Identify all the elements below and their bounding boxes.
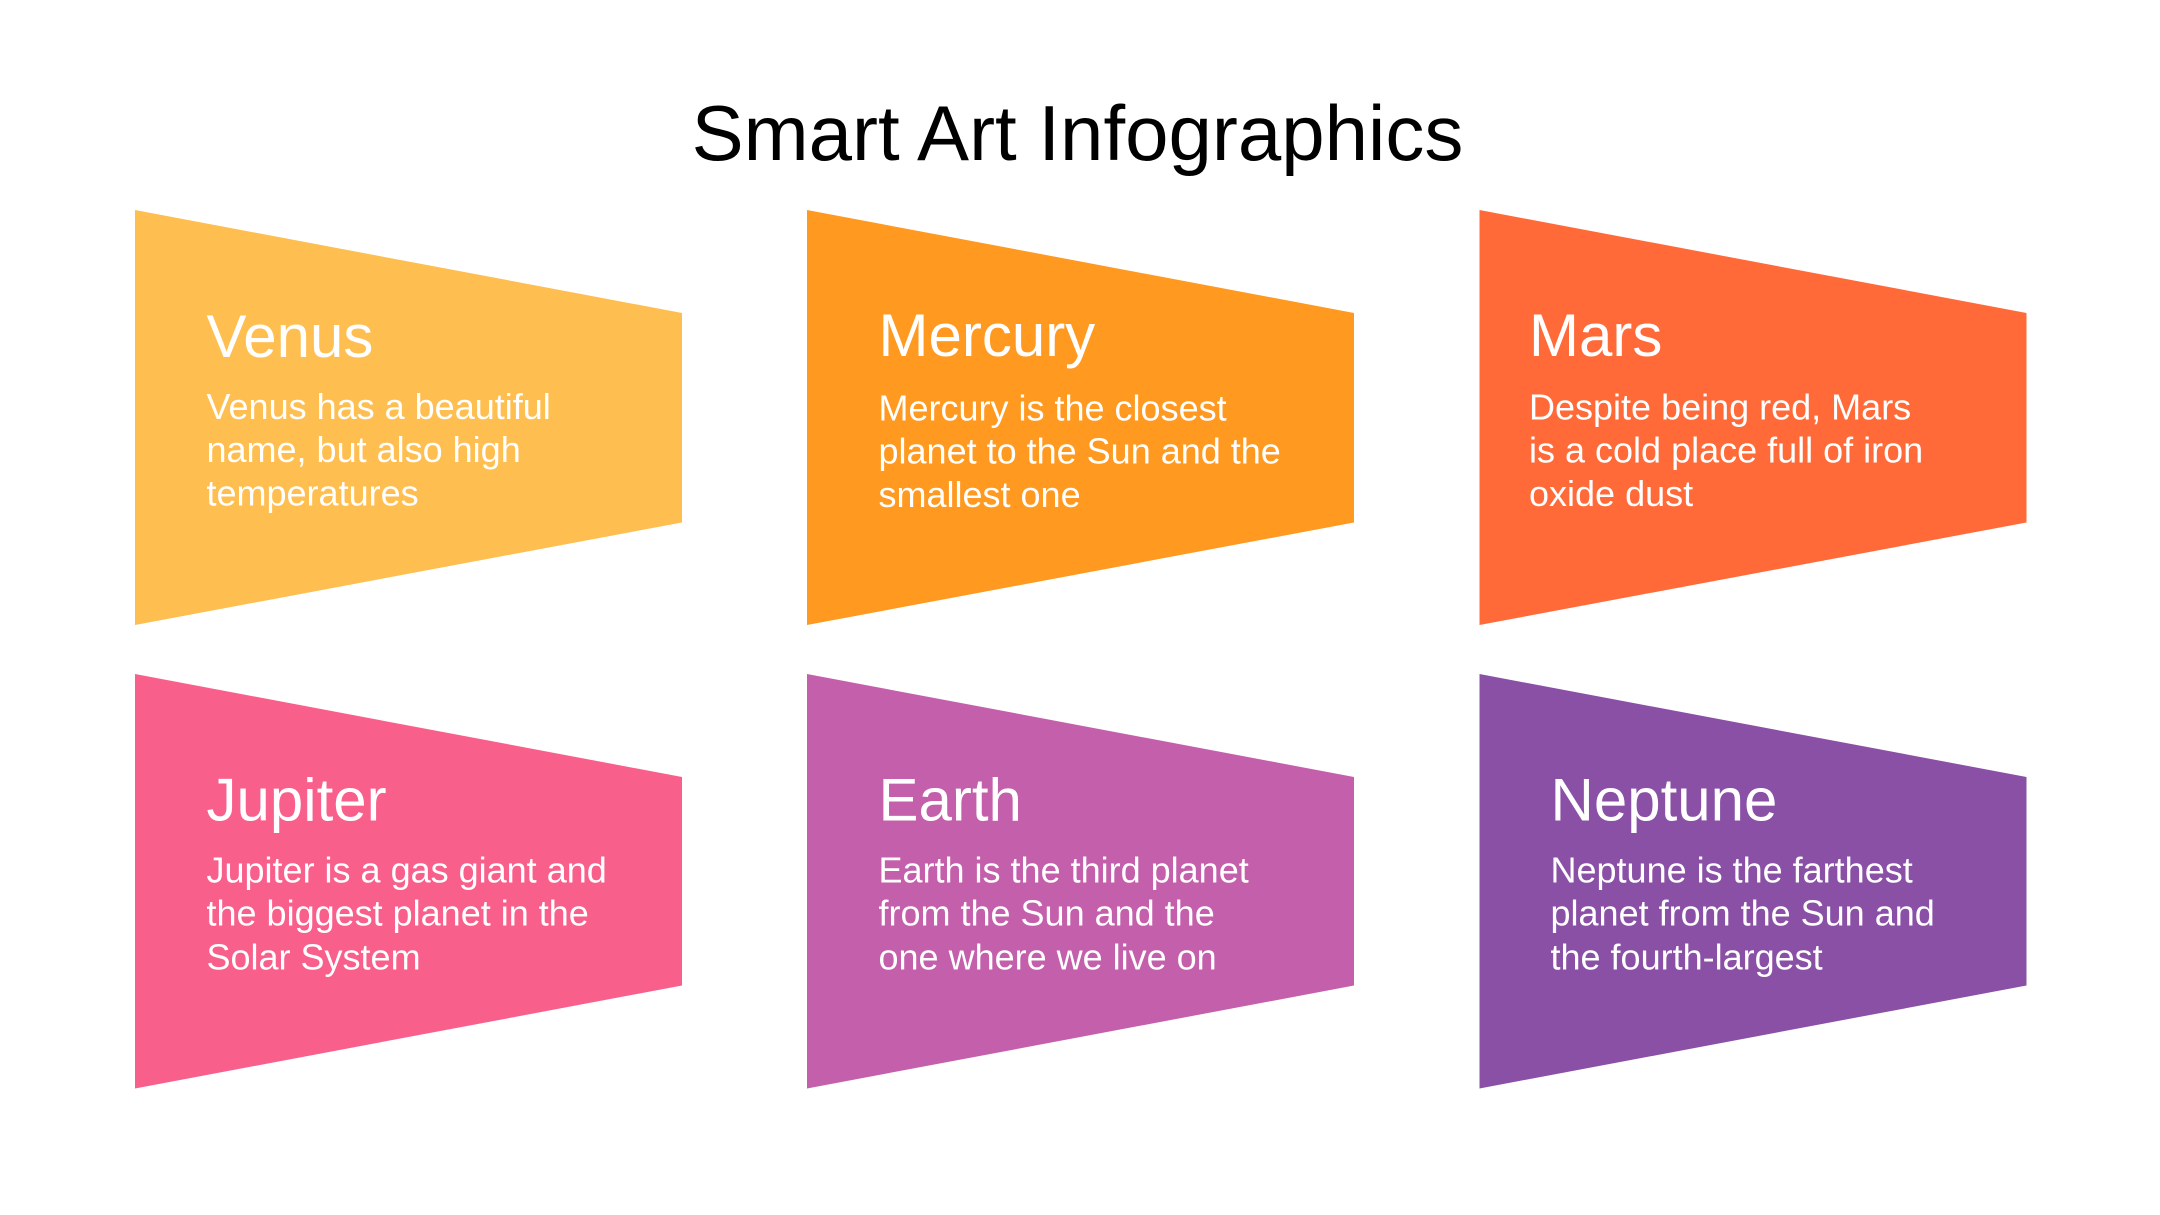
panel: Jupiter: Jupiter <box>206 766 387 834</box>
panel: Jupiter: Solar System <box>206 936 421 978</box>
panel: Mercury <box>807 210 1354 625</box>
panel: Mars: Mars <box>1529 302 1662 369</box>
panel: Jupiter <box>135 674 682 1088</box>
panel: Mars: Despite being red, Mars <box>1529 386 1911 428</box>
panel: Venus: temperatures <box>206 472 419 514</box>
panel: Earth: Earth <box>878 766 1022 834</box>
panel: Neptune <box>1480 674 2026 1088</box>
panel: Venus: name, but also high <box>206 429 521 470</box>
panel: Venus <box>135 210 682 625</box>
panel: Earth: from the Sun and the <box>878 892 1215 934</box>
panel: Neptune: Neptune <box>1550 766 1777 834</box>
panel: Mercury: Mercury is the closest <box>878 388 1227 428</box>
panel: Mars: is a cold place full of iron <box>1529 430 1923 470</box>
panel: Neptune: Neptune is the farthest <box>1550 850 1913 890</box>
panel: Mercury: Mercury <box>878 302 1095 369</box>
panel: Neptune: planet from the Sun and <box>1550 892 1935 934</box>
panel: Mars <box>1480 210 2026 625</box>
panel: Venus: Venus has a beautiful <box>206 386 551 427</box>
panel: Earth: Earth is the third planet <box>878 850 1249 890</box>
panel: Earth <box>807 674 1354 1088</box>
panel: Jupiter: the biggest planet in the <box>206 892 589 934</box>
panel: Earth: one where we live on <box>878 936 1217 978</box>
panel: Mars: oxide dust <box>1529 473 1693 514</box>
panel: Neptune: the fourth-largest <box>1550 936 1823 978</box>
panel: Mercury: planet to the Sun and the <box>878 430 1281 472</box>
panel: Mercury: smallest one <box>878 474 1081 515</box>
panel: Jupiter: Jupiter is a gas giant and <box>206 850 607 890</box>
title: Smart Art Infographics <box>692 89 1463 177</box>
panel: Venus: Venus <box>206 303 373 370</box>
